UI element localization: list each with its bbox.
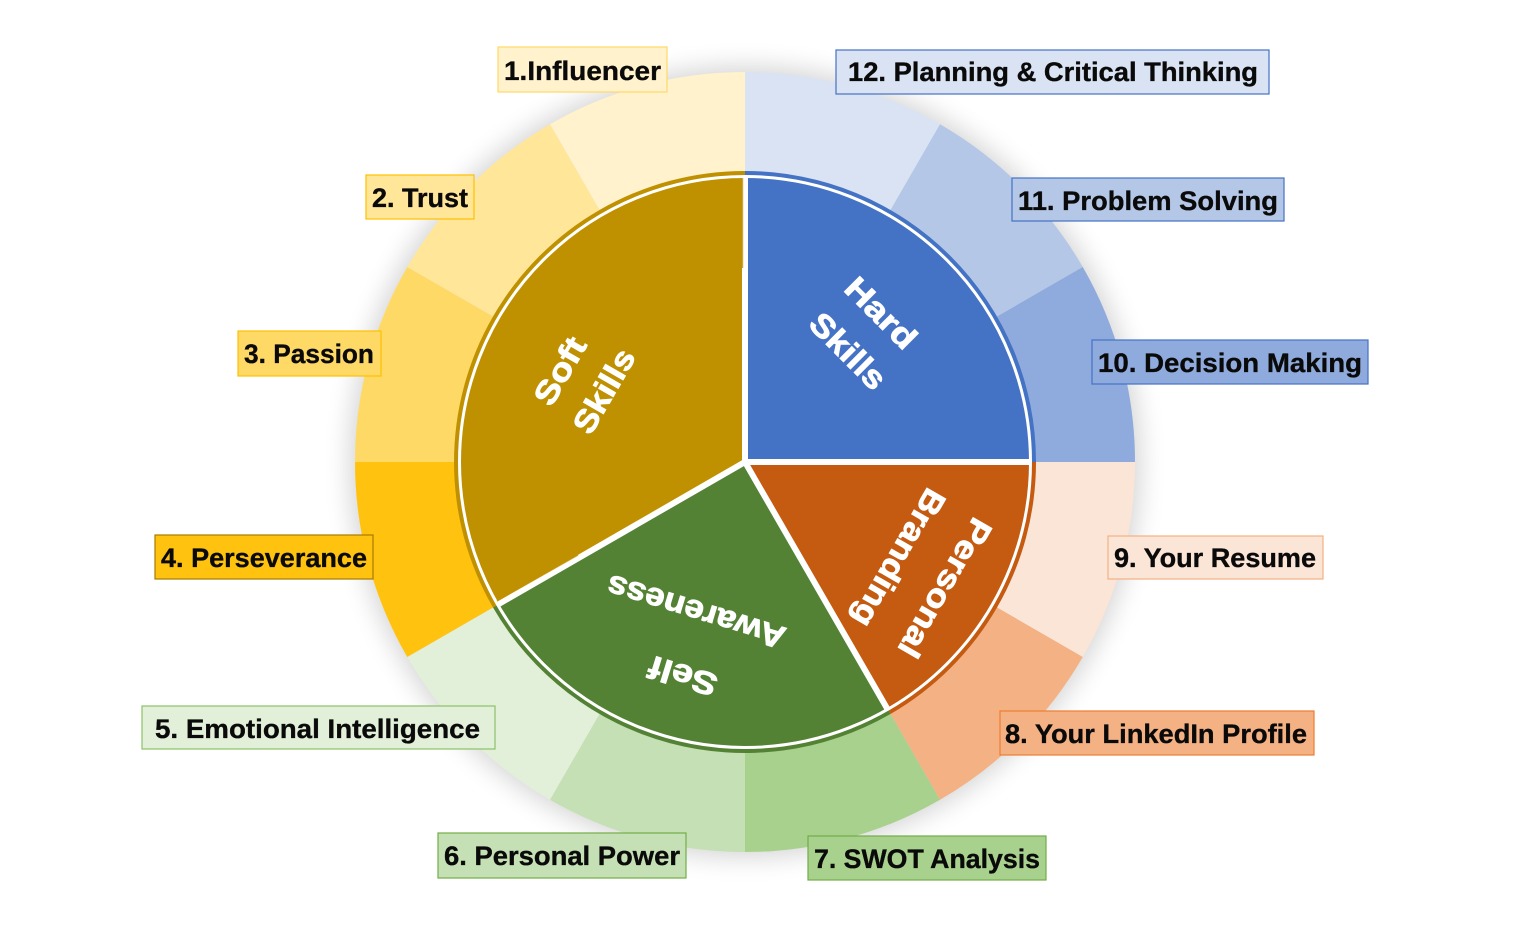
category label: soft skills: Skills [565,342,643,440]
label 2 [366,175,474,219]
segment 11 [745,124,1083,462]
category label: soft skills [526,330,643,440]
category label: self awareness [602,568,790,703]
segment 6 [550,462,745,852]
category label: personal branding: Personal [891,512,999,664]
sector: personal branding [745,462,1036,714]
label 7: 7. SWOT Analysis [814,844,1040,874]
label 3 [238,331,381,376]
segment 4 [355,462,745,657]
label 9 [1108,536,1323,579]
label 6 [438,833,686,878]
label 1: 1.Influencer [504,56,662,86]
category label: soft skills: Soft [526,330,594,412]
label 12: 12. Planning & Critical Thinking [848,57,1258,87]
sector: hard skills [745,171,1036,462]
category label: hard skills: Hard [838,270,924,356]
category label: self awareness: Awareness [602,568,790,656]
label 10 [1092,340,1368,384]
label 5 [142,706,495,749]
segment 8 [745,462,1083,800]
label 11: 11. Problem Solving [1018,186,1278,216]
wheel shadow [350,67,1140,857]
label 9: 9. Your Resume [1114,543,1316,573]
label 7 [808,836,1046,880]
segment 5 [407,462,745,800]
label 8: 8. Your LinkedIn Profile [1005,719,1307,749]
sector: self awareness [493,462,890,753]
outer ring of twelve skill segments [355,72,1135,852]
category label: hard skills [802,270,924,397]
segment 1 [550,72,745,462]
category label: hard skills: Skills [802,305,894,397]
inner pie of four categories [454,171,1036,753]
category label: personal branding: Branding [845,482,953,634]
label 6: 6. Personal Power [444,841,680,871]
label 11 [1012,178,1284,221]
segment 12 [745,72,940,462]
label 4 [155,535,373,579]
label 5: 5. Emotional Intelligence [155,714,480,744]
label 1 [498,47,667,92]
label 12 [836,50,1269,94]
category label: self awareness: Self [644,648,722,703]
segment 10 [745,267,1135,462]
category label: personal branding [845,482,999,664]
label 10: 10. Decision Making [1098,348,1362,378]
segment 9 [745,462,1135,657]
segment 3 [355,267,745,462]
label 4: 4. Perseverance [161,543,367,573]
sector: soft skills [454,171,745,608]
label 2: 2. Trust [372,183,468,213]
segment 2 [407,124,745,462]
segment 7 [745,462,940,852]
label 8 [1000,711,1314,755]
label 3: 3. Passion [244,339,374,369]
